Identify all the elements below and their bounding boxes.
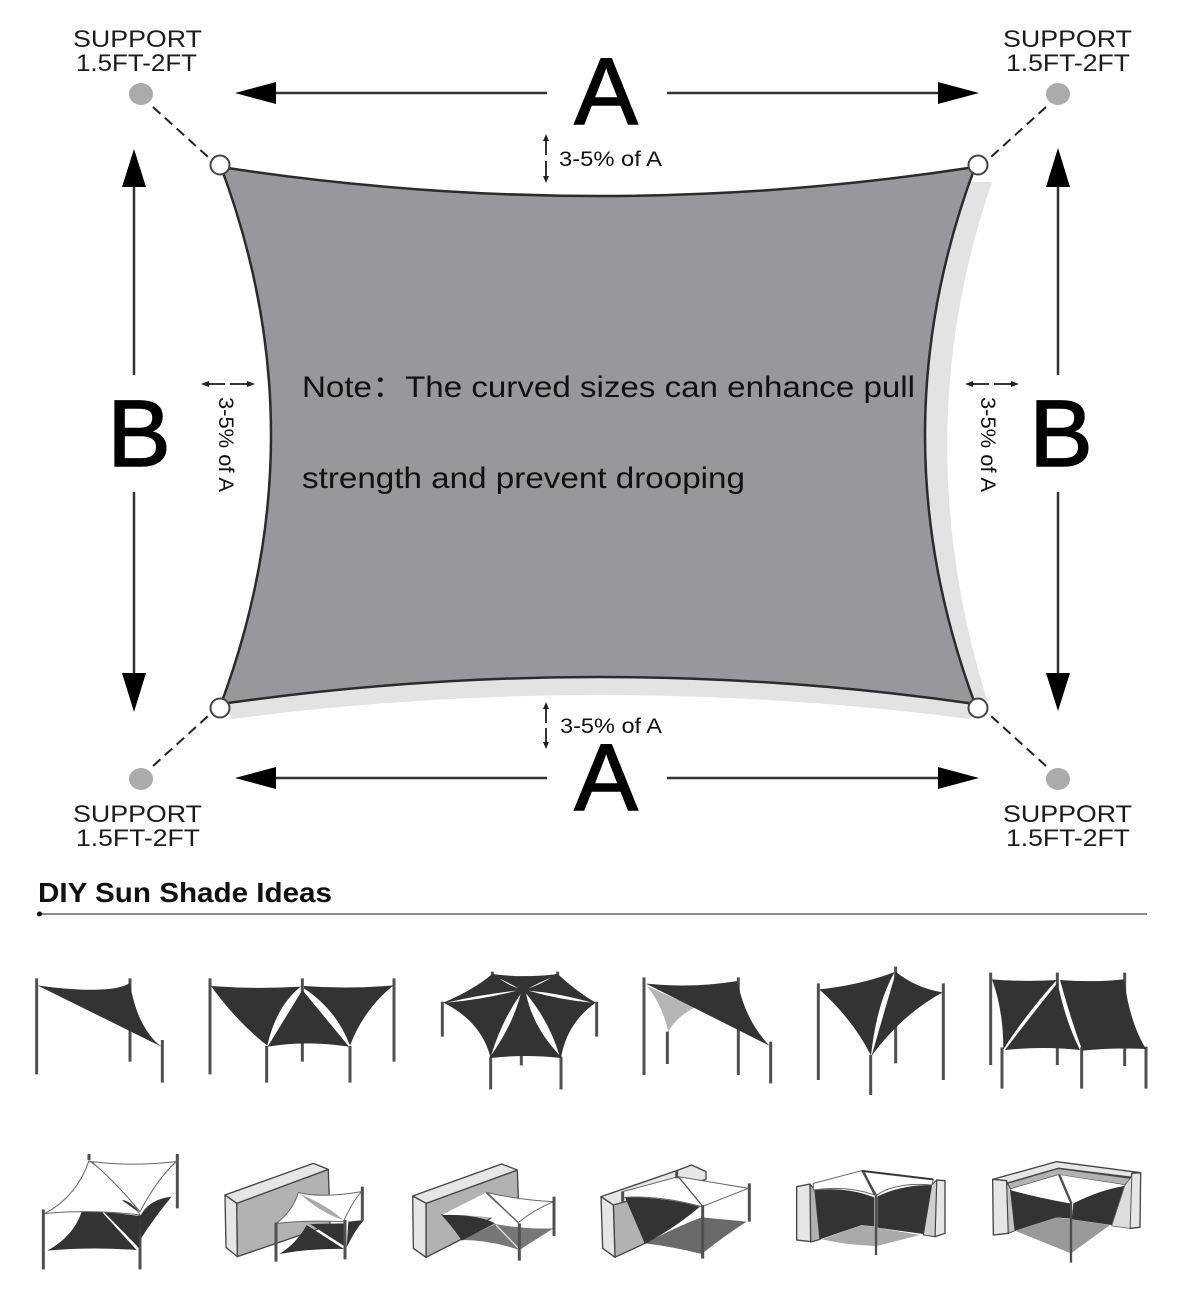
- corner support: top right: [968, 26, 1132, 174]
- corner support: top left: 1.5FT-2FT: [76, 50, 197, 77]
- sag label: left: 3-5% of A: [214, 397, 237, 492]
- corner support: bottom left: [73, 698, 230, 852]
- dimension B: right: [1029, 148, 1093, 711]
- corner support: bottom left: SUPPORT: [73, 801, 202, 828]
- icon: wall-mounted sail with floor shadow: [601, 1165, 749, 1259]
- sag label: bottom: [543, 702, 662, 749]
- corner support: bottom right: SUPPORT: [1003, 801, 1132, 828]
- icon: three sails in a wide row: [991, 973, 1146, 1089]
- icon: wall-mounted sail over dark shade: [413, 1164, 554, 1261]
- sag label: left: [201, 381, 255, 492]
- sag label: top: [543, 134, 662, 183]
- icon: corner sail between two wall ends: [797, 1171, 945, 1255]
- dimension B: left: B: [107, 381, 171, 487]
- note text: Note：The curved sizes can enhance pull: [302, 371, 915, 404]
- corner support: top right: 1.5FT-2FT: [1006, 50, 1130, 77]
- dimension A: bottom: A: [574, 725, 638, 831]
- dimension A: top: A: [574, 39, 638, 145]
- sag label: right: [965, 381, 1019, 492]
- heading: DIY Sun Shade Ideas: DIY Sun Shade Ideas: [38, 877, 332, 908]
- icon: hexagonal arrangement: [442, 972, 597, 1089]
- corner support: top right: SUPPORT: [1003, 26, 1132, 53]
- corner support: bottom left: 1.5FT-2FT: [76, 825, 200, 852]
- corner support: top left: SUPPORT: [73, 26, 202, 53]
- dimension A: bottom: [235, 725, 979, 831]
- sag label: bottom: 3-5% of A: [560, 715, 662, 738]
- shade sail: [221, 167, 975, 704]
- dimension A: top: [235, 39, 979, 145]
- dimension B: right: B: [1029, 381, 1093, 487]
- icon: sail in an L-shaped wall corner: [993, 1162, 1141, 1263]
- note text: strength and prevent drooping: [302, 462, 745, 495]
- icon: three triangles in a row: [210, 978, 394, 1083]
- icon: freestanding sails with shadow: [43, 1154, 177, 1269]
- icon: two kite sails: [818, 967, 943, 1095]
- icon: triangle over grey triangle: [644, 977, 771, 1083]
- icon: wall-mounted sail with shadow: [225, 1163, 364, 1262]
- corner support: bottom right: 1.5FT-2FT: [1006, 825, 1130, 852]
- heading: DIY Sun Shade Ideas: [37, 877, 1147, 916]
- panel: shade sail sizing diagram: [73, 26, 1132, 852]
- dimension B: left: [107, 149, 171, 712]
- sag label: right: 3-5% of A: [976, 397, 999, 492]
- icon: single triangle on three poles: [37, 978, 162, 1083]
- sag label: top: 3-5% of A: [559, 148, 662, 171]
- sail shadow: [222, 182, 992, 719]
- note text: [302, 371, 915, 495]
- corner support: top left: [73, 26, 230, 174]
- corner support: bottom right: [968, 698, 1132, 852]
